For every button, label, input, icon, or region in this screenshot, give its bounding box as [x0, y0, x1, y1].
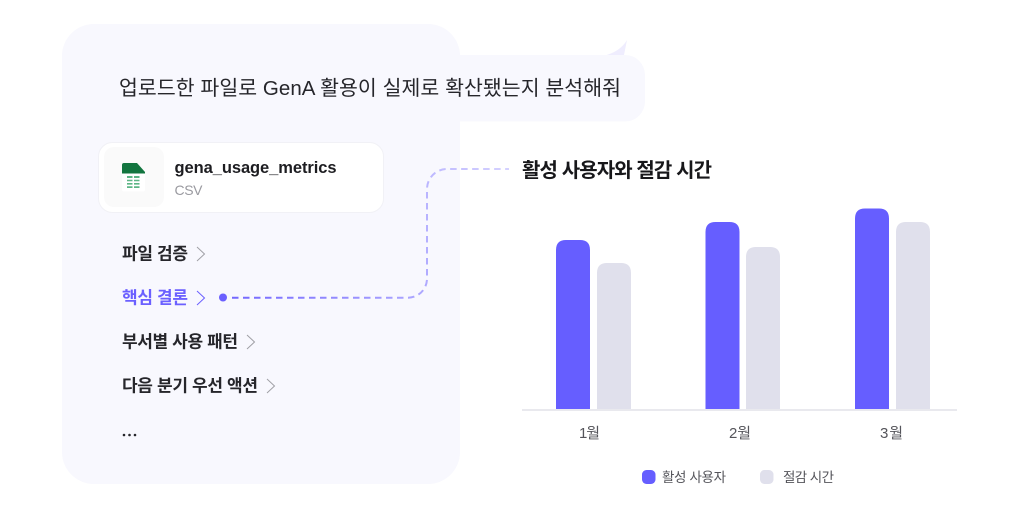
menu item: ellipsis — [123, 434, 136, 436]
file card — [98, 142, 384, 212]
x axis labels: 1월 — [579, 425, 600, 442]
March bars — [855, 208, 930, 409]
prompt text: 업로드한 파일로 GenA 활용이 실제로 확산됐는지 분석해줘 — [119, 77, 621, 100]
February bars — [706, 222, 780, 409]
axis line — [522, 409, 957, 411]
menu item: key conclusion: 핵심 결론 — [122, 288, 188, 308]
chart title: 활성 사용자와 절감 시간 — [522, 159, 712, 182]
legend — [642, 470, 834, 485]
legend: time saved — [760, 470, 834, 485]
speech bubble — [119, 40, 645, 122]
legend: time saved: 절감 시간 — [783, 470, 834, 485]
menu item: file validation: 파일 검증 — [122, 244, 188, 264]
x axis labels: 2월 — [729, 425, 751, 442]
menu item: next quarter actions: 다음 분기 우선 액션 — [122, 376, 258, 396]
x axis labels: 3월 — [880, 425, 903, 442]
legend: active users: 활성 사용자 — [662, 470, 727, 485]
bar chart — [522, 208, 957, 442]
x axis labels — [579, 425, 903, 442]
file type: CSV — [174, 182, 203, 198]
January bars — [556, 240, 631, 409]
icon: spreadsheet file — [104, 147, 164, 207]
panel: chat background — [62, 24, 460, 484]
menu item: department usage pattern: 부서별 사용 패턴 — [122, 332, 238, 352]
file name: gena_usage_metrics — [174, 159, 336, 177]
connector: dashed line from conclusion to chart — [219, 169, 509, 302]
